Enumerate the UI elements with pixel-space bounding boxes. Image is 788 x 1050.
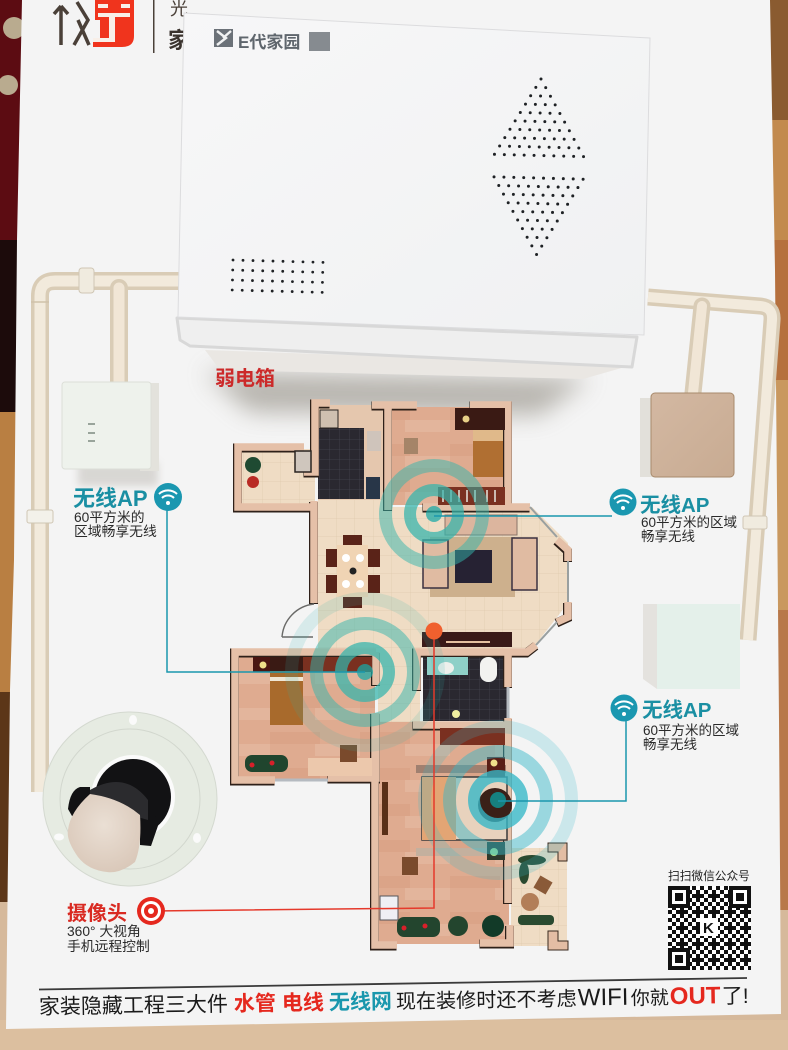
icon: wifi bbox=[154, 483, 182, 511]
footer slogan: 现在装修时还不考虑 bbox=[396, 988, 577, 1013]
floor: bathroom bbox=[423, 656, 509, 721]
box label: 弱电箱 bbox=[215, 367, 275, 390]
footer slogan: OUT bbox=[670, 982, 721, 1010]
icon: wifi bbox=[610, 694, 638, 722]
callout: right wireless AP: 60平方米的区域 bbox=[641, 515, 737, 530]
box logo bbox=[214, 29, 330, 52]
callout: lower right wireless AP: 无线AP bbox=[642, 699, 711, 722]
terrace furniture bbox=[518, 855, 554, 925]
brand logo bbox=[54, 0, 190, 53]
callout: lower right wireless AP: 60平方米的区域 bbox=[643, 723, 739, 738]
floor: lower left bedroom bbox=[238, 655, 375, 780]
connector line: right AP to living room bbox=[434, 515, 612, 517]
footer rule bbox=[39, 978, 747, 990]
lower left bedroom furniture bbox=[245, 657, 372, 776]
icon: target bbox=[137, 897, 165, 925]
wifi signal rings: living room bbox=[386, 466, 482, 562]
callout: left wireless AP: 区域畅享无线 bbox=[74, 523, 157, 539]
walls bbox=[234, 403, 568, 950]
connector line: camera to dome position bbox=[152, 622, 442, 911]
callout: right wireless AP bbox=[610, 488, 737, 544]
floor: living room bbox=[318, 500, 568, 725]
footer slogan: 了! bbox=[722, 985, 749, 1008]
floor: kitchen bbox=[318, 405, 386, 500]
callout: lower right wireless AP bbox=[610, 694, 739, 752]
callout: left wireless AP bbox=[73, 483, 182, 539]
wifi signal rings: lower left bedroom bbox=[292, 598, 438, 746]
connector line: lower right AP to master bedroom bbox=[498, 720, 626, 801]
footer slogan: 无线网 bbox=[329, 990, 392, 1014]
brand logo: 家 bbox=[168, 28, 190, 53]
footer slogan: WIFI bbox=[578, 984, 629, 1012]
connector line: left AP to bedroom bbox=[167, 510, 365, 672]
QR code block: 扫扫微信公众号 bbox=[668, 869, 750, 883]
balcony plant bbox=[245, 451, 311, 488]
shadow cast by wiring box bbox=[205, 372, 590, 415]
speaker holes upper diamond bbox=[494, 78, 586, 157]
wifi signal rings: master bedroom bbox=[424, 726, 572, 874]
wiring box bbox=[177, 13, 650, 390]
device: camera bbox=[43, 712, 217, 886]
footer slogan: 水管 bbox=[234, 992, 276, 1016]
footer slogan: 你就 bbox=[631, 987, 669, 1010]
QR code block bbox=[668, 869, 751, 970]
device: left wireless AP bbox=[62, 382, 159, 486]
upper bedroom furniture bbox=[404, 408, 505, 505]
box logo: E代家园 bbox=[238, 32, 300, 52]
callout: camera: 手机远程控制 bbox=[67, 939, 150, 954]
footer slogan: 家装隐藏工程三大件 bbox=[39, 993, 228, 1019]
left water pipes bbox=[27, 268, 180, 792]
footer slogan: 电线 bbox=[282, 992, 324, 1015]
callout: camera: 360° 大视角 bbox=[67, 924, 141, 939]
callout: camera: 摄像头 bbox=[67, 902, 127, 925]
floor: master bedroom bbox=[378, 722, 509, 944]
floor: upper bedroom bbox=[390, 407, 508, 505]
device: gold wireless AP bbox=[640, 393, 734, 477]
floor: terrace bbox=[511, 848, 567, 946]
callout: lower right wireless AP: 畅享无线 bbox=[643, 736, 697, 752]
floor: balcony bbox=[239, 449, 315, 506]
device: white wireless AP bbox=[643, 604, 740, 689]
callout: right wireless AP: 无线AP bbox=[640, 494, 709, 517]
floor plan bbox=[234, 403, 568, 950]
callout: left wireless AP: 60平方米的 bbox=[74, 510, 145, 525]
living room furniture bbox=[422, 515, 537, 647]
ventilation holes bbox=[232, 260, 323, 292]
right water pipes bbox=[648, 297, 772, 640]
callout: left wireless AP: 无线AP bbox=[73, 486, 148, 511]
dining table bbox=[326, 535, 380, 608]
callout: right wireless AP: 畅享无线 bbox=[641, 528, 695, 544]
master bedroom furniture bbox=[380, 728, 512, 937]
icon: wifi bbox=[610, 488, 636, 516]
speaker holes lower diamond bbox=[492, 177, 583, 256]
QR code block: K bbox=[703, 920, 714, 937]
callout: camera bbox=[67, 897, 165, 954]
bathroom fixtures bbox=[427, 657, 497, 718]
